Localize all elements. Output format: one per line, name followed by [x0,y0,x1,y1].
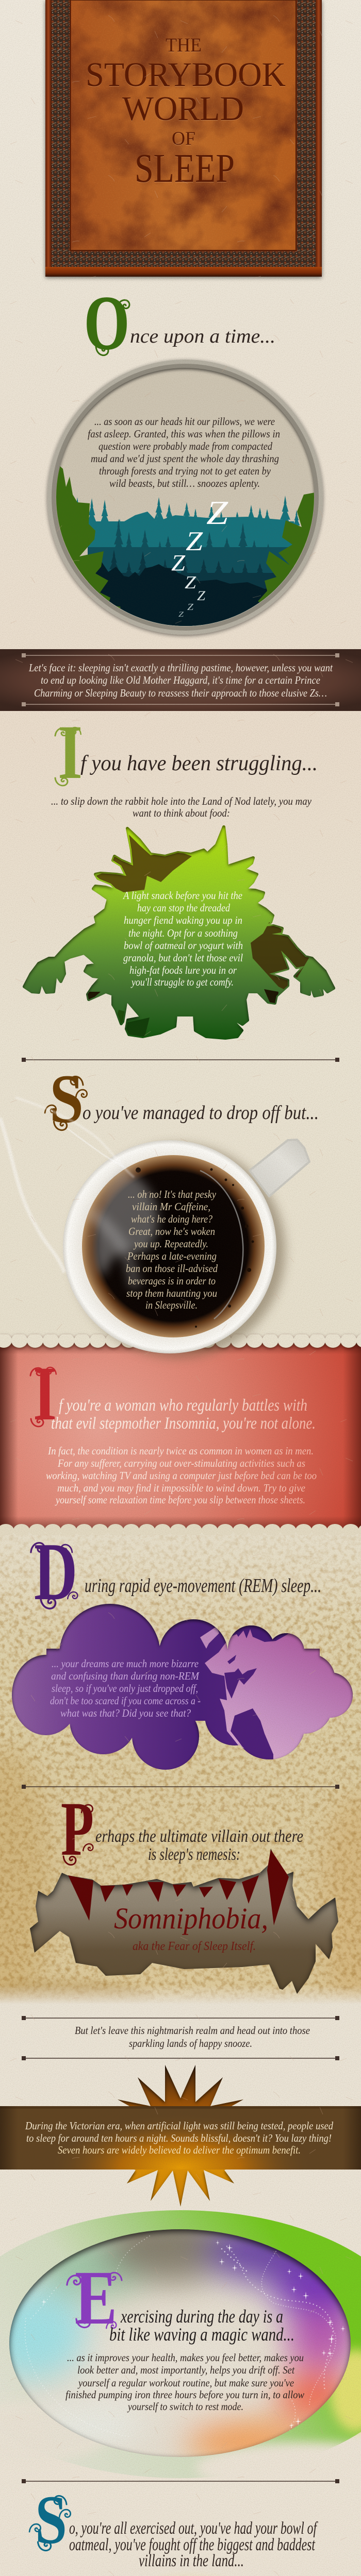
section: insomnia text [30,1351,317,1506]
coffee text [126,1188,218,1311]
panel: forest medallion [45,360,330,640]
book title: STORYBOOK [86,56,286,94]
cloud text: sleep, so if you've only just dropped off, [52,1682,198,1694]
insomnia heading: f you're a woman who regularly battles with [59,1396,307,1415]
banner: victorian era [0,2106,361,2170]
fiend text: the night. Opt for a soothing [128,927,238,939]
section: so you've managed to drop off [0,1061,319,1358]
banner text [28,662,333,699]
banner text: Seven hours are widely believed to deliver the optimum benefit. [58,2144,301,2156]
cloud text: ... your dreams are much more bizarre [52,1657,199,1670]
drop cap O: O [84,280,129,366]
transition text: sparkling lands of happy snooze. [129,2037,252,2049]
exercise text: yourself a regular workout routine, but make sure you've [77,2377,294,2389]
cloud text: don't be too scared if you come across a - [50,1694,201,1707]
section: somniphobia [30,1786,338,1994]
coffee text: beverages is in order to [128,1275,216,1287]
nightmare silhouette [200,1623,361,1762]
exercise text: finished pumping iron three hours before you turn in, to allow [65,2388,304,2401]
divider [22,1785,339,1789]
medallion text: question were probably made from compacted [99,440,272,452]
divider [22,2056,339,2060]
heading: erhaps the ultimate villain out there [95,1827,303,1846]
heading: o you've managed to drop off but... [83,1102,319,1124]
fiend text: granola, but don't let those evil [123,952,243,964]
sleeping Zs: Z [178,611,184,619]
coffee text: stop them haunting you [126,1287,217,1299]
coffee text: what's he doing here? [131,1213,212,1225]
book title: OF [172,128,195,149]
coffee text: ... oh no! It's that pesky [128,1188,217,1200]
insomnia body: yourself some relaxation time before you slip between those sheets. [55,1494,305,1506]
book title [86,35,286,191]
insomnia body: much, and you may find it impossible to wind down. Try to give [57,1482,305,1494]
exercise text: ... as it improves your health, makes you feel better, makes you [67,2351,304,2364]
book cover [45,0,322,277]
cloud text: and confusing than during non-REM [51,1670,200,1682]
fiend text: hunger fiend waking you up in [124,914,242,926]
coffee cup [0,1097,309,1358]
cloud text: what was that? Did you see that? [60,1707,191,1719]
intro text: ... to slip down the rabbit hole into the Land of Nod lately, you may [51,795,312,807]
magic disk [0,2210,361,2463]
steam [0,1097,134,1273]
heading [109,2306,294,2345]
banner: let's face it [0,649,361,711]
sleeping Zs: Z [197,588,206,603]
medallion text: fast asleep. Granted, this was when the pillows in [88,428,280,440]
forest [56,466,314,626]
heading: f you have been struggling... [80,752,318,775]
insomnia body: working, watching TV and using a computer just before bed can be too [46,1469,317,1482]
sleeping Zs: Z [171,550,186,575]
somniphobia title: Somniphobia, [114,1902,268,1935]
medallion text: ... as soon as our heads hit our pillows, we were [94,415,275,428]
book title: THE [166,35,202,56]
sleeping Zs: Z [206,494,228,532]
fiend text: bowl of oatmeal or yogurt with [124,939,243,952]
dream cloud [0,1597,361,1772]
book title: WORLD [122,90,244,128]
heading: is sleep's nemesis: [148,1845,240,1864]
coffee text: ban on those ill-advised [126,1262,218,1275]
divider [22,2479,339,2483]
drop cap S: S [50,1061,84,1138]
somniphobia subtitle: aka the Fear of Sleep Itself. [133,1940,256,1953]
sleeping Zs: Z [185,572,196,592]
banner text [25,2120,333,2156]
ferns [56,466,314,608]
cloud text [50,1657,201,1719]
drop cap E: E [75,2255,117,2341]
drop cap P: P [61,1786,94,1872]
band: red insomnia panel [0,1334,361,1535]
fiend text: hay can stop the dreaded [137,902,230,914]
drop cap S teal: S [35,2482,67,2558]
medallion disk [56,368,315,626]
section: once upon a time [84,280,275,366]
hunger fiend monster [24,827,334,1038]
divider [22,2016,339,2020]
drop cap P [61,1786,94,1872]
transition text [75,2024,310,2049]
sleeping Zs: Z [186,527,203,556]
intro text: want to think about food: [133,807,230,819]
heading: bit like waving a magic wand... [109,2324,294,2345]
heading: villains in the land... [139,2551,244,2570]
section: all exercised out [29,2482,325,2576]
exercise text: yourself to switch to rest mode. [127,2400,243,2413]
banner text: to end up looking like Old Mother Haggard, it's time for a certain Prince [41,674,320,686]
insomnia body [46,1445,317,1506]
drop cap D: D [34,1526,77,1617]
exercise text [65,2351,304,2413]
star cluster [41,2240,346,2429]
section: if you have been struggling [24,709,334,1038]
sunburst [118,2065,243,2207]
medallion text: wild beasts, but still… snoozes aplenty. [109,477,260,489]
section: REM sleep [12,1542,353,1770]
fiend text: A light snack before you hit the [122,889,242,902]
medallion text: mud and we'd just spent the whole day thrashing [91,452,279,465]
drop cap D [31,1526,77,1617]
insomnia body: For any sufferer, carrying out over-stimulating activities such as [57,1457,305,1469]
transition text: But let's leave this nightmarish realm and head out into those [75,2024,310,2037]
drop cap I: I [58,709,83,795]
medallion text: through forests and trying not to get eaten by [99,465,271,477]
coffee text: Perhaps a late-evening [127,1250,217,1262]
book title: SLEEP [135,146,235,191]
fiend text: you'll struggle to get comfy. [130,976,234,988]
heading [69,2519,318,2570]
sparkles [25,2236,336,2447]
heading: xercising during the day is a [120,2306,283,2327]
fiend text: high-fat foods lure you in or [129,964,237,976]
drop cap I red: I [33,1351,57,1436]
coffee text: villain Mr Caffeine, [132,1200,210,1213]
exercise text: look better and, most importantly, helps you drift off. Set [77,2364,295,2376]
insomnia body: In fact, the condition is nearly twice as common in women as in men. [47,1445,314,1457]
intro text [51,795,312,819]
insomnia heading [51,1396,316,1433]
sleeping Zs: Z [187,602,194,612]
cup handle [250,1140,309,1196]
medallion text [88,415,280,489]
fangs [68,1850,289,1925]
fiend text [122,889,243,988]
coffee text: you up. Repeatedly. [133,1238,208,1250]
background: aged parchment [0,1525,361,2020]
heading: nce upon a time... [130,326,275,347]
torn paper hole [30,1849,338,1994]
sleeping Zs [171,494,228,619]
phone light glow [70,2570,312,2576]
coffee text: Great, now he's woken [128,1225,215,1238]
coffee text: in Sleepsville. [145,1299,198,1311]
divider [22,1058,339,1062]
heading [95,1827,303,1864]
section: exercising magic halo [0,2210,361,2494]
